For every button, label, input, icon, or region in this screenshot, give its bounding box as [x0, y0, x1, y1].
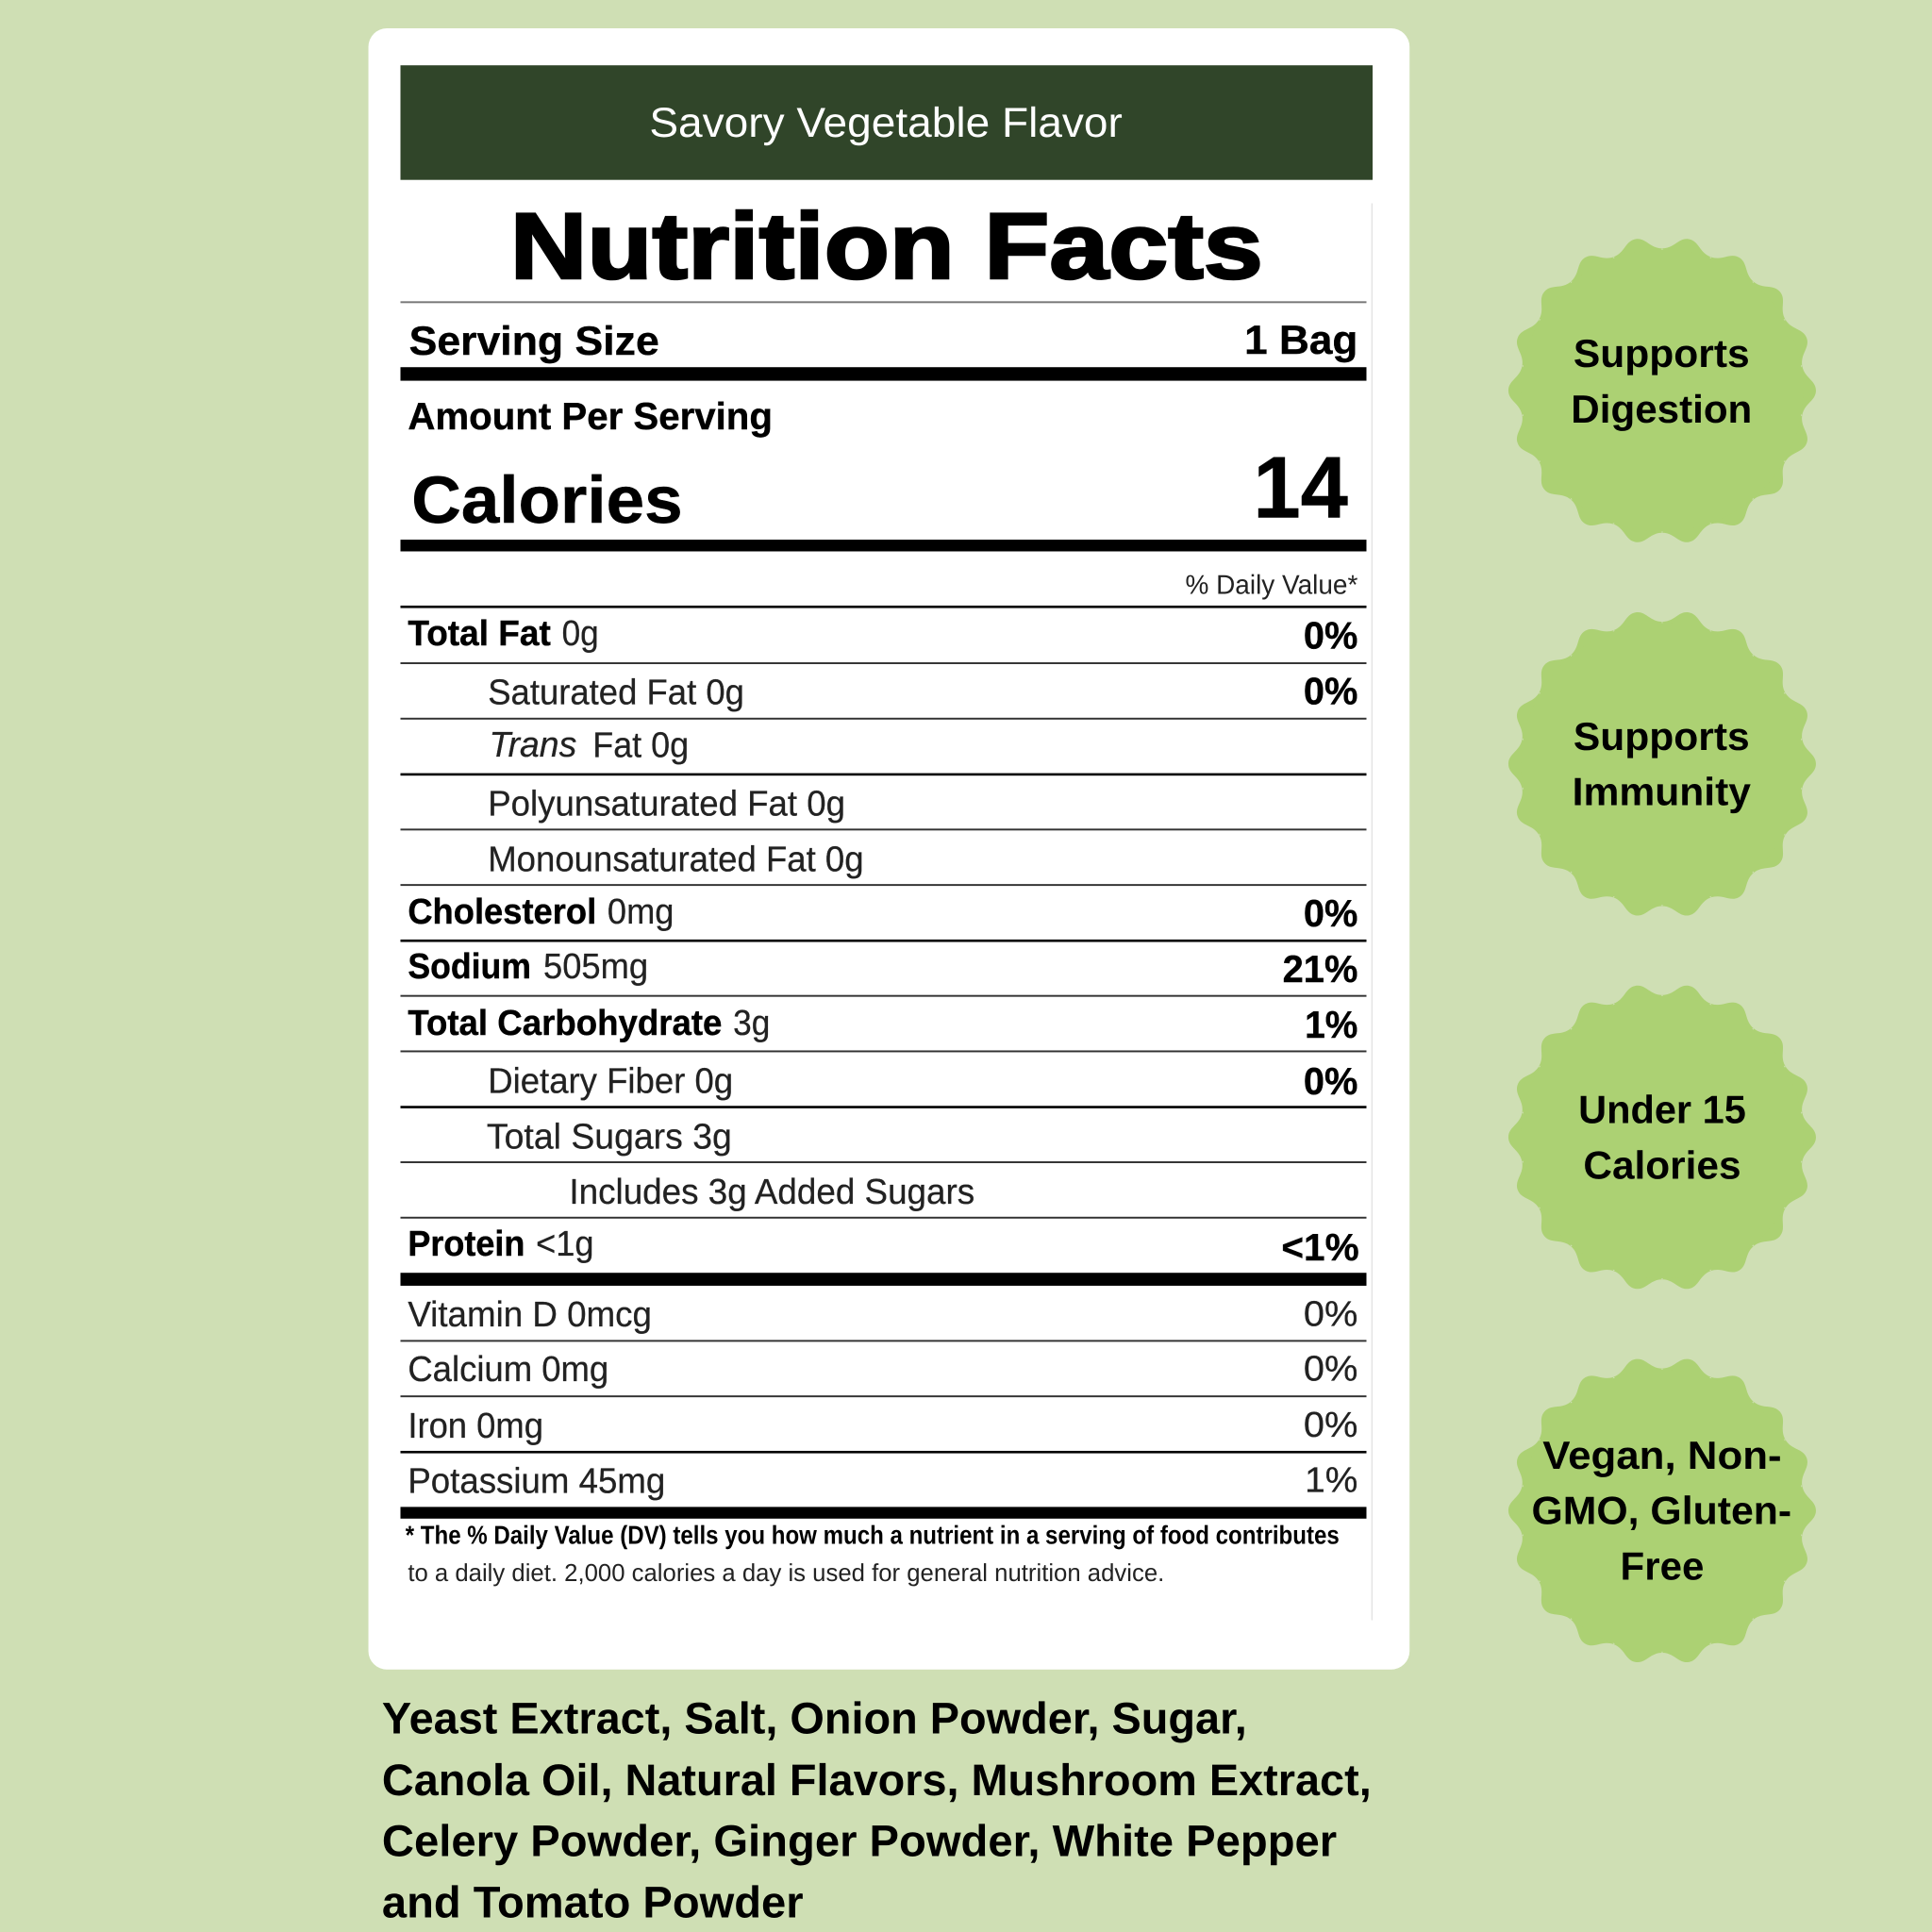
calories row: Calories: [411, 463, 683, 537]
badge: supports digestion: Supports: [1574, 331, 1750, 375]
row: total carbohydrate: 1%: [1305, 1003, 1357, 1046]
row: dietary fiber: [488, 1059, 1357, 1103]
row: trans fat: Fat 0g: [592, 726, 689, 766]
row: potassium: Potassium 45mg: [408, 1462, 665, 1502]
row: total carbohydrate: 3g: [733, 1004, 770, 1043]
row: cholesterol: Cholesterol: [408, 892, 596, 932]
badge: vegan, non-gmo, gluten-free: GMO, Gluten-: [1532, 1489, 1791, 1533]
row: potassium: [408, 1461, 1357, 1502]
badge: supports digestion: Digestion: [1571, 387, 1752, 431]
row: saturated fat: 0%: [1304, 670, 1357, 713]
row: potassium: 1%: [1305, 1461, 1357, 1501]
row: polyunsaturated fat: Polyunsaturated Fat 0g: [488, 785, 845, 824]
badge: supports immunity: [1500, 600, 1824, 927]
ingredients list: [382, 1693, 1372, 1927]
amount per serving: Amount Per Serving: [408, 395, 773, 438]
ingredients list: and Tomato Powder: [382, 1876, 804, 1927]
serving size row: Serving Size: [409, 318, 659, 363]
badge: under 15 calories: [1500, 974, 1824, 1301]
badge: vegan, non-gmo, gluten-free: Vegan, Non-: [1542, 1433, 1782, 1477]
row: iron: 0%: [1304, 1406, 1357, 1445]
row: protein: <1%: [1281, 1226, 1359, 1269]
ingredients list: Canola Oil, Natural Flavors, Mushroom Extract,: [382, 1755, 1372, 1805]
row: total fat: [408, 614, 1357, 658]
row: protein: [408, 1224, 1359, 1269]
heading: Nutrition Facts: Nutrition Facts: [510, 194, 1263, 299]
row: protein: Protein: [408, 1224, 525, 1264]
footnote: * The % Daily Value (DV) tells you how much a nutrient in a serving of food contributes: [406, 1522, 1340, 1550]
row: total fat: Total Fat: [408, 614, 551, 654]
row: sodium: 21%: [1283, 947, 1357, 991]
row: calcium: Calcium 0mg: [408, 1351, 608, 1390]
row: total fat: 0g: [562, 614, 599, 654]
row: saturated fat: Saturated Fat 0g: [488, 674, 744, 713]
row: dietary fiber: Dietary Fiber 0g: [488, 1062, 733, 1102]
nutrition facts label: [400, 194, 1373, 1621]
badge: supports digestion: [1500, 226, 1824, 555]
row: total carbohydrate: [408, 1003, 1357, 1046]
row: calcium: [408, 1350, 1357, 1390]
row: total sugars: Total Sugars 3g: [487, 1118, 732, 1157]
calories row: [411, 440, 1349, 537]
badge: under 15 calories: Calories: [1583, 1142, 1741, 1187]
row: cholesterol: 0%: [1304, 892, 1357, 935]
row: total fat: 0%: [1304, 614, 1357, 658]
row: trans fat: Trans: [490, 725, 576, 765]
row: protein: <1g: [536, 1224, 594, 1264]
row: sodium: Sodium: [408, 947, 531, 987]
row: saturated fat: [488, 670, 1357, 713]
row: dietary fiber: 0%: [1304, 1059, 1357, 1103]
badge: supports immunity: Supports: [1574, 714, 1750, 758]
flavor header banner: [400, 65, 1373, 180]
flavor header banner: Savory Vegetable Flavor: [649, 100, 1123, 146]
ingredients list: Yeast Extract, Salt, Onion Powder, Sugar,: [382, 1693, 1247, 1743]
row: calcium: 0%: [1304, 1350, 1357, 1390]
row: iron: [408, 1406, 1357, 1446]
row: sodium: 505mg: [543, 947, 648, 987]
row: cholesterol: [408, 892, 1357, 935]
footnote: to a daily diet. 2,000 calories a day is used for general nutrition advice.: [408, 1560, 1164, 1587]
badge: under 15 calories: Under 15: [1578, 1088, 1746, 1132]
panel: nutrition card: [369, 28, 1409, 1670]
badge: vegan, non-gmo, gluten-free: [1500, 1347, 1824, 1674]
row: vitamin d: Vitamin D 0mcg: [408, 1295, 652, 1335]
calories row: 14: [1253, 440, 1349, 537]
row: sodium: [408, 947, 1357, 991]
badge: vegan, non-gmo, gluten-free: Free: [1621, 1544, 1704, 1589]
row: vitamin d: 0%: [1304, 1295, 1357, 1335]
footnote: [406, 1522, 1340, 1587]
serving size row: [409, 317, 1357, 363]
ingredients list: Celery Powder, Ginger Powder, White Pepper: [382, 1816, 1337, 1866]
row: cholesterol: 0mg: [608, 892, 674, 932]
daily value header: % Daily Value*: [1185, 569, 1358, 600]
row: monounsaturated fat: Monounsaturated Fat 0g: [488, 841, 864, 880]
row: added sugars: Includes 3g Added Sugars: [569, 1173, 974, 1212]
row: iron: Iron 0mg: [408, 1407, 543, 1446]
row: trans fat: [490, 725, 689, 766]
badge: supports immunity: Immunity: [1573, 770, 1751, 814]
row: vitamin d: [408, 1295, 1357, 1335]
serving size row: 1 Bag: [1244, 317, 1357, 362]
row: total carbohydrate: Total Carbohydrate: [408, 1004, 722, 1043]
